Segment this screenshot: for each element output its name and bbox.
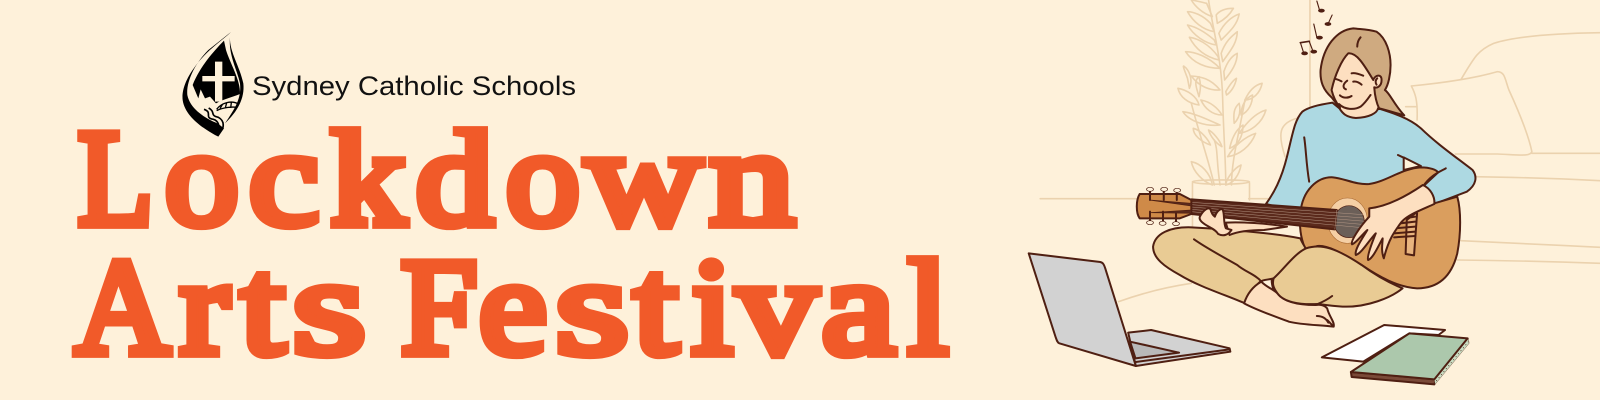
guitar body xyxy=(1300,167,1460,288)
hair xyxy=(1320,28,1404,115)
sweater xyxy=(1266,103,1475,213)
illustration: woman playing guitar in a room with laptop and notebook xyxy=(1028,0,1600,386)
title line 2: e xyxy=(479,231,547,383)
title line 2: F xyxy=(401,231,478,383)
title line 1: w xyxy=(586,102,702,254)
title line 1: o xyxy=(165,102,239,254)
room line art xyxy=(1040,0,1600,302)
notebook xyxy=(1351,333,1469,384)
title line 2: t xyxy=(241,231,285,383)
title line 1 xyxy=(77,126,798,230)
title line 2: a xyxy=(822,231,895,383)
left leg xyxy=(1153,227,1306,303)
right leg xyxy=(1273,246,1403,307)
laptop xyxy=(1029,253,1230,366)
guitar headstock xyxy=(1137,187,1191,226)
title line 2: l xyxy=(908,231,948,383)
title: Lockdown Arts Festival xyxy=(72,126,950,360)
face xyxy=(1332,53,1382,120)
title line 1: c xyxy=(249,102,319,254)
title line 1: k xyxy=(331,102,406,254)
leg creases xyxy=(1194,239,1333,326)
title line 2: A xyxy=(75,231,170,383)
right hand xyxy=(1352,185,1434,260)
title line 1: o xyxy=(506,102,580,254)
guitar neck xyxy=(1191,199,1365,229)
foot xyxy=(1244,282,1334,327)
music notes xyxy=(1300,1,1332,55)
left hand and forearm xyxy=(1200,208,1287,235)
title line 2: s xyxy=(293,231,365,383)
title line 2: r xyxy=(180,231,229,383)
title line 2 xyxy=(72,255,950,360)
plant xyxy=(1178,0,1266,227)
woman figure: hair, face, sweater xyxy=(1266,28,1475,213)
title line 2: i xyxy=(692,231,732,383)
logo wordmark: Sydney Catholic Schools xyxy=(252,71,576,101)
title line 1: L xyxy=(78,102,153,254)
title line 2: t xyxy=(634,231,678,383)
icon: flame crest xyxy=(182,32,244,137)
paper sheet xyxy=(1322,325,1445,362)
logo: Sydney Catholic Schools xyxy=(182,32,576,137)
title line 1: n xyxy=(710,102,795,254)
title line 1: d xyxy=(416,102,493,254)
title line 2: s xyxy=(556,231,628,383)
title line 2: v xyxy=(737,231,817,383)
